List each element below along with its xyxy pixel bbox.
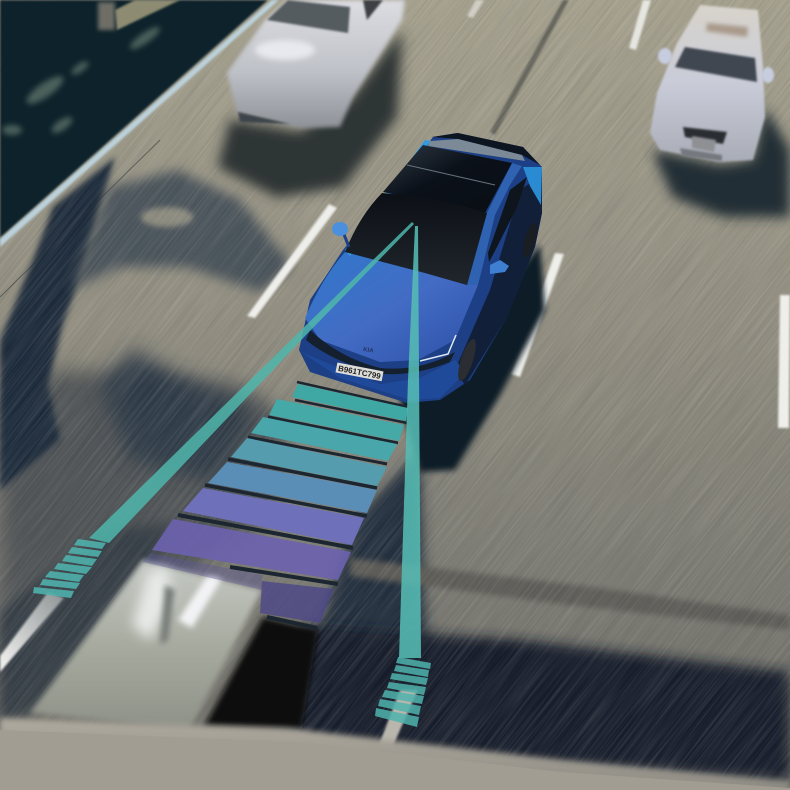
badge: KIA (363, 347, 374, 355)
road joint (490, 0, 569, 135)
silver audi (650, 5, 790, 217)
pavement upper left (0, 0, 268, 238)
license plate: В961ТС799 (337, 364, 382, 381)
dark trunk (205, 617, 318, 728)
hood highlight (255, 40, 315, 60)
strip 3 (251, 417, 397, 461)
braking distance strips (143, 382, 408, 628)
left mirror stem (343, 232, 349, 247)
foreground blurred white car (30, 560, 318, 730)
white car, top (218, 0, 405, 197)
roof rear trim (428, 139, 525, 161)
grille of audi (683, 127, 727, 144)
blue sedan (299, 133, 545, 472)
side windows (488, 177, 527, 262)
strip 1 (292, 384, 408, 421)
shadow of white car (218, 30, 402, 197)
right pillar (467, 163, 522, 285)
side window of white car (363, 0, 383, 20)
silver car body (30, 560, 262, 730)
right mirror (490, 260, 509, 274)
navy tree trunk shadow (0, 157, 115, 490)
roof tint of audi (706, 23, 748, 37)
strip 7 (152, 519, 351, 580)
strip 2 (269, 399, 404, 441)
rear edge highlight (523, 167, 542, 205)
plate of audi (692, 136, 716, 152)
rear wheel (521, 221, 539, 259)
front bumper of white car (238, 112, 290, 124)
bright reflection left (132, 566, 172, 640)
bottom left shadow (0, 520, 175, 722)
body of audi (650, 5, 765, 162)
right mirror of audi (762, 67, 774, 83)
right lane beam (399, 226, 421, 658)
headlight (420, 335, 456, 361)
dark flank (455, 175, 542, 385)
strip 8 left overlay (143, 553, 262, 590)
strip 8 (260, 581, 334, 623)
strip 4 (231, 438, 387, 486)
grille (306, 330, 455, 374)
dappled light (2, 24, 163, 136)
windshield of white car (267, 0, 350, 33)
body of blue sedan (299, 133, 542, 403)
rear dark rim (432, 133, 540, 165)
dark pavement (0, 0, 268, 238)
roof seam (407, 165, 495, 185)
left lane beam (89, 222, 414, 543)
left pillar highlight (345, 140, 431, 256)
tree canopy shadow (70, 170, 293, 292)
left mirror (332, 222, 348, 236)
hood (305, 252, 478, 362)
strip 5 (208, 462, 377, 513)
centre dark seam (160, 585, 175, 645)
shadow of audi (652, 107, 790, 217)
panoramic roof (383, 145, 512, 213)
foreground parapet (0, 718, 790, 790)
lower bumper (301, 352, 466, 400)
lower bumper of audi (680, 148, 722, 161)
left mirror of audi (658, 48, 672, 64)
bright reflection right (178, 575, 222, 628)
sunlit patch (115, 0, 180, 30)
left lane ticks (33, 539, 106, 598)
lower left shadow (100, 350, 255, 480)
body of white car (227, 0, 405, 128)
tree trunk (98, 2, 115, 30)
windshield of audi (675, 47, 757, 82)
strip gaps (178, 382, 408, 628)
windshield (345, 193, 487, 285)
right lane ticks (375, 657, 431, 727)
road crack (0, 140, 160, 297)
strip 6 (183, 488, 364, 545)
front wheel (454, 337, 480, 383)
mid left mottled grey (0, 370, 290, 720)
road seam (350, 558, 790, 630)
shadow of blue sedan (400, 245, 545, 472)
shadow behind lane beam (290, 450, 430, 735)
lit patch in canopy shadow (141, 207, 193, 227)
large bottom shadow (300, 625, 790, 780)
